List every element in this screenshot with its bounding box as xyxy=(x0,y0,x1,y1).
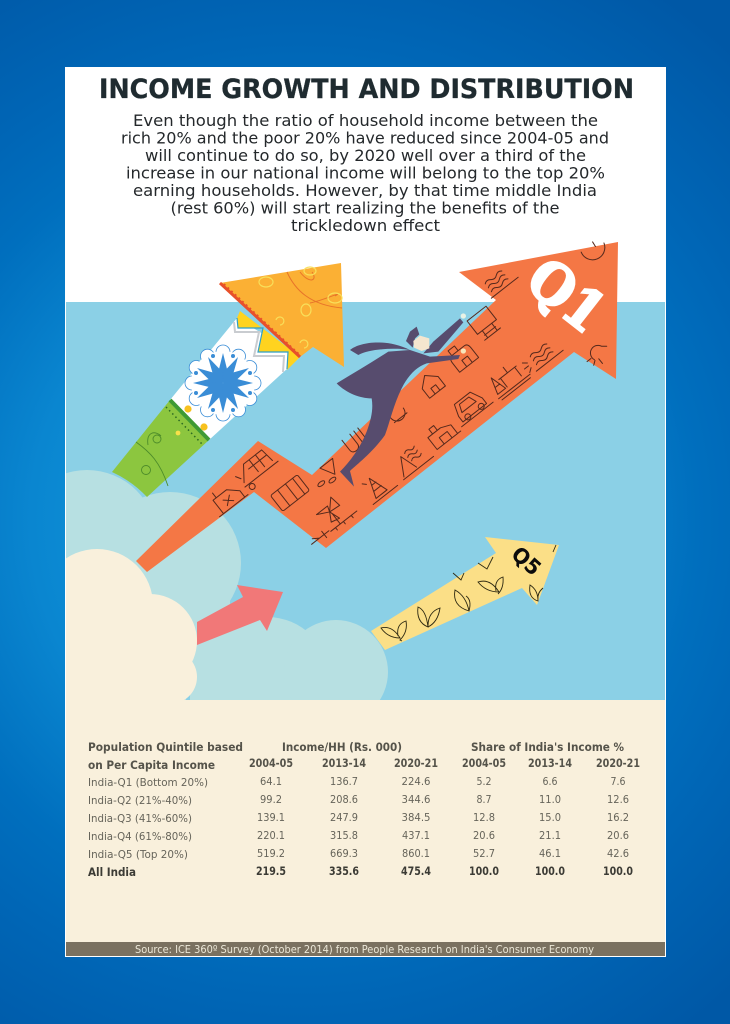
row Q2: 344.6 xyxy=(402,793,430,806)
arrow: pink xyxy=(197,585,283,645)
year headers: 2004-05 xyxy=(462,757,506,770)
row Q3 xyxy=(88,811,629,825)
arrow shaft yellow section xyxy=(237,311,300,370)
intro text: Even though the ratio of household income between the xyxy=(133,112,598,130)
row All India: 219.5 xyxy=(256,865,286,878)
icon: building xyxy=(232,446,282,493)
sprouts xyxy=(453,545,556,580)
intro text: will continue to do so, by 2020 well over a third of the xyxy=(145,147,586,165)
row Q3: 384.5 xyxy=(402,811,430,824)
body and legs xyxy=(337,350,460,487)
clouds: light xyxy=(66,470,388,700)
icon: billboard xyxy=(467,306,502,341)
leaf 4 xyxy=(478,577,503,594)
icon: windmill xyxy=(313,490,359,534)
row Q4: 20.6 xyxy=(473,829,495,842)
arrow: Q1 orange xyxy=(136,240,618,572)
clouds: cream xyxy=(66,549,197,700)
row Q2: 12.6 xyxy=(607,793,629,806)
row Q4 xyxy=(88,829,629,843)
head pattern xyxy=(287,272,342,308)
row Q2: 99.2 xyxy=(260,793,282,806)
intro text: trickledown effect xyxy=(291,217,440,235)
row All India: All India xyxy=(88,866,136,879)
row All India: 100.0 xyxy=(469,865,499,878)
intro text xyxy=(121,112,609,235)
icon: chevron xyxy=(320,458,341,479)
icon: partial bottom xyxy=(309,528,331,547)
row Q5: 669.3 xyxy=(330,847,358,860)
row Q4: 21.1 xyxy=(539,829,561,842)
row Q4: India-Q4 (61%-80%) xyxy=(88,830,192,843)
icon: waves lower xyxy=(520,337,563,376)
row All India: 475.4 xyxy=(401,865,431,878)
row Q1: 64.1 xyxy=(260,775,282,788)
row Q3: 139.1 xyxy=(257,811,285,824)
row Q4: 315.8 xyxy=(330,829,358,842)
panel: table background xyxy=(66,700,665,942)
icon: drum xyxy=(270,475,310,511)
icon: hut xyxy=(445,339,479,372)
year headers: 2013-14 xyxy=(528,757,572,770)
row Q2: India-Q2 (21%-40%) xyxy=(88,794,192,807)
raised arm xyxy=(423,318,463,353)
Q5 label: Q5 xyxy=(507,542,546,580)
scarf xyxy=(350,342,410,355)
leaf icons xyxy=(381,545,556,641)
table xyxy=(88,741,640,879)
green swirl pattern xyxy=(136,433,168,486)
arrow: Q5 yellow xyxy=(371,537,559,650)
row Q3: 247.9 xyxy=(330,811,358,824)
icon: tower xyxy=(359,467,398,504)
intro text: earning households. However, by that time middle India xyxy=(133,182,597,200)
yellow arrow body xyxy=(371,537,559,650)
intro text: rich 20% and the poor 20% have reduced since 2004-05 and xyxy=(121,130,609,148)
source bar xyxy=(66,942,665,956)
year headers: 2020-21 xyxy=(394,757,438,770)
panel: sky xyxy=(66,302,665,700)
row Q4: 20.6 xyxy=(607,829,629,842)
leaf 5 xyxy=(530,585,543,601)
row Q1 xyxy=(88,775,626,789)
icons on arrow xyxy=(205,240,613,547)
row Q1: India-Q1 (Bottom 20%) xyxy=(88,776,208,789)
arrow head xyxy=(220,263,344,367)
row Q2 xyxy=(88,793,629,807)
icon: waves upper xyxy=(481,264,518,298)
arrow shaft green section xyxy=(112,400,209,497)
row Q4: 437.1 xyxy=(402,829,430,842)
icon: bulb xyxy=(582,340,613,370)
row Q3: 15.0 xyxy=(539,811,561,824)
row Q2: 208.6 xyxy=(330,793,358,806)
year headers: 2013-14 xyxy=(322,757,366,770)
icon: car xyxy=(448,385,493,427)
year headers: 2020-21 xyxy=(596,757,640,770)
table: on Per Capita Income xyxy=(88,759,215,772)
row Q1: 224.6 xyxy=(402,775,430,788)
row Q4: 220.1 xyxy=(257,829,285,842)
green stripe xyxy=(170,400,209,440)
leaf 2 xyxy=(418,607,440,627)
icon: reeds xyxy=(390,439,434,480)
row Q2: 11.0 xyxy=(539,793,561,806)
Q1 label: Q1 xyxy=(514,245,618,346)
year headers xyxy=(249,757,640,770)
table heading: quintile: Population Quintile based xyxy=(88,741,243,754)
icon: factory small xyxy=(205,476,248,517)
row Q1: 5.2 xyxy=(476,775,492,788)
year headers: 2004-05 xyxy=(249,757,293,770)
hands xyxy=(461,313,466,319)
icon: factory xyxy=(424,414,461,449)
icon: chakra flower xyxy=(185,345,261,421)
zigzag line xyxy=(237,318,288,369)
orange arrow body xyxy=(136,242,618,572)
row Q5: India-Q5 (Top 20%) xyxy=(88,848,188,861)
row All India: 100.0 xyxy=(535,865,565,878)
icon: house xyxy=(417,369,445,398)
arrow shaft white section xyxy=(170,318,300,440)
source text: Source: ICE 360º Survey (October 2014) from People Research on India's Consumer Economy xyxy=(135,943,595,956)
table heading: share: Share of India's Income % xyxy=(471,741,624,754)
icon: seeds xyxy=(317,473,337,491)
face xyxy=(413,336,429,351)
row All India: 100.0 xyxy=(603,865,633,878)
hair xyxy=(406,327,419,348)
row Q5: 860.1 xyxy=(402,847,430,860)
row Q5: 519.2 xyxy=(257,847,285,860)
row Q2: 8.7 xyxy=(476,793,492,806)
icon: temple xyxy=(485,357,532,401)
panel: white card xyxy=(65,67,666,957)
row Q3: 16.2 xyxy=(607,811,629,824)
intro text: increase in our national income will belong to the top 20% xyxy=(126,164,605,182)
table heading: income: Income/HH (Rs. 000) xyxy=(282,741,402,754)
icon: arc xyxy=(391,408,408,424)
row Q5: 46.1 xyxy=(539,847,561,860)
row All India: 335.6 xyxy=(329,865,359,878)
title: INCOME GROWTH AND DISTRIBUTION xyxy=(99,74,634,105)
row Q1: 136.7 xyxy=(330,775,358,788)
row Q1: 7.6 xyxy=(610,775,626,788)
figure: businessman xyxy=(337,313,466,487)
row Q3: 12.8 xyxy=(473,811,495,824)
icon: top arc xyxy=(580,240,607,262)
dots xyxy=(184,405,192,413)
red serrated edge xyxy=(220,283,300,357)
row Q5: 52.7 xyxy=(473,847,495,860)
arrow: tricolour xyxy=(112,263,344,497)
leaf 1 xyxy=(381,621,406,641)
row Q3: India-Q3 (41%-60%) xyxy=(88,812,192,825)
intro text: (rest 60%) will start realizing the benefits of the xyxy=(170,200,560,218)
row Q1: 6.6 xyxy=(542,775,558,788)
leaf 3 xyxy=(455,590,470,611)
row Q5: 42.6 xyxy=(607,847,629,860)
icon: U shapes xyxy=(342,428,368,454)
row Q5 xyxy=(88,847,629,861)
row All India xyxy=(88,865,633,879)
